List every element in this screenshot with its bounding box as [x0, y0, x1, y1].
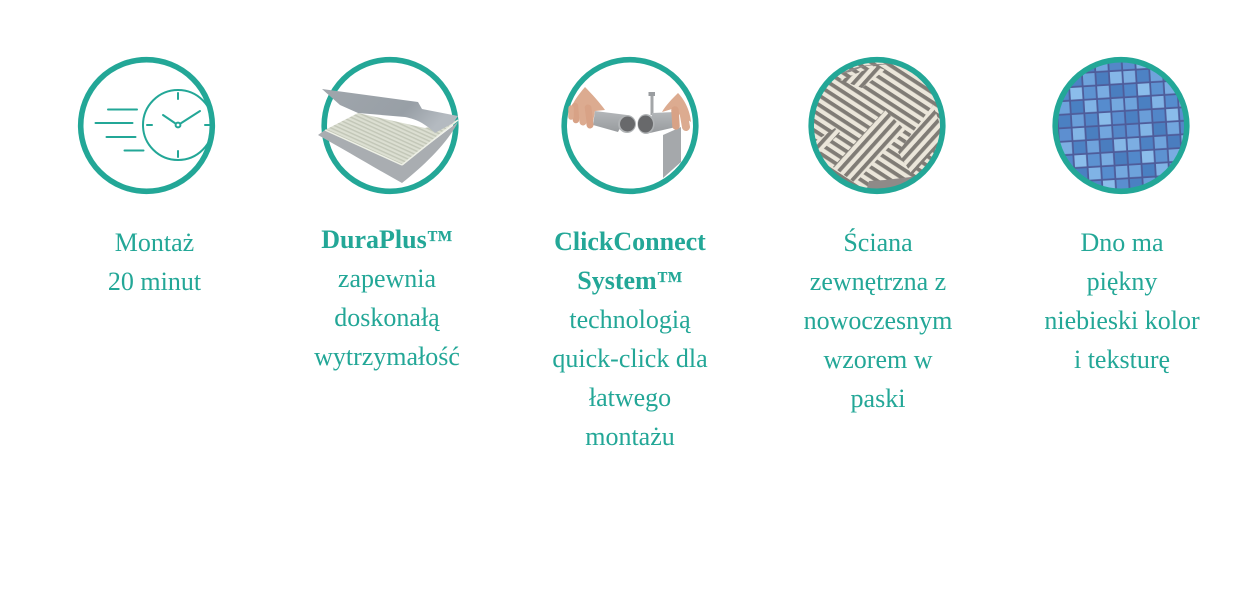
icon: blue mosaic floor [1055, 60, 1187, 191]
icon: ClickConnect pipes and hands [564, 60, 696, 191]
icon: DuraPlus material layers [318, 60, 458, 191]
text: outer wall: zewnętrzna z [810, 267, 946, 296]
text: ClickConnect System: technologią [569, 305, 691, 334]
icon: clock with speed lines [81, 60, 213, 191]
text: assembly time: 20 minut [108, 267, 201, 296]
text: floor: Dno ma [1080, 228, 1164, 257]
text: outer wall: nowoczesnym [804, 306, 952, 335]
text: ClickConnect System [552, 227, 708, 451]
text: ClickConnect System: quick-click dla [552, 344, 708, 373]
text: assembly time [108, 228, 201, 296]
icon row [78, 56, 1190, 194]
text: outer wall: wzorem w [823, 345, 932, 374]
text: DuraPlus: wytrzymałość [314, 342, 460, 371]
text: outer wall [804, 228, 952, 413]
text: ClickConnect System: ClickConnect [554, 227, 706, 256]
text: floor: piękny [1087, 267, 1157, 296]
text: ClickConnect System: System™ [577, 266, 683, 295]
text: outer wall: paski [851, 384, 905, 413]
text: DuraPlus: doskonałą [334, 303, 440, 332]
text: floor: niebieski kolor [1044, 306, 1200, 335]
icon: wall stripe pattern [810, 58, 945, 192]
text: ClickConnect System: łatwego [589, 383, 671, 412]
text: DuraPlus [314, 225, 460, 371]
text: ClickConnect System: montażu [585, 422, 675, 451]
text: floor: i teksturę [1074, 345, 1170, 374]
text: outer wall: Ściana [843, 228, 913, 257]
text: DuraPlus: DuraPlus™ [321, 225, 453, 254]
text: DuraPlus: zapewnia [338, 264, 436, 293]
text: floor [1044, 228, 1200, 374]
text: assembly time: Montaż [115, 228, 194, 257]
